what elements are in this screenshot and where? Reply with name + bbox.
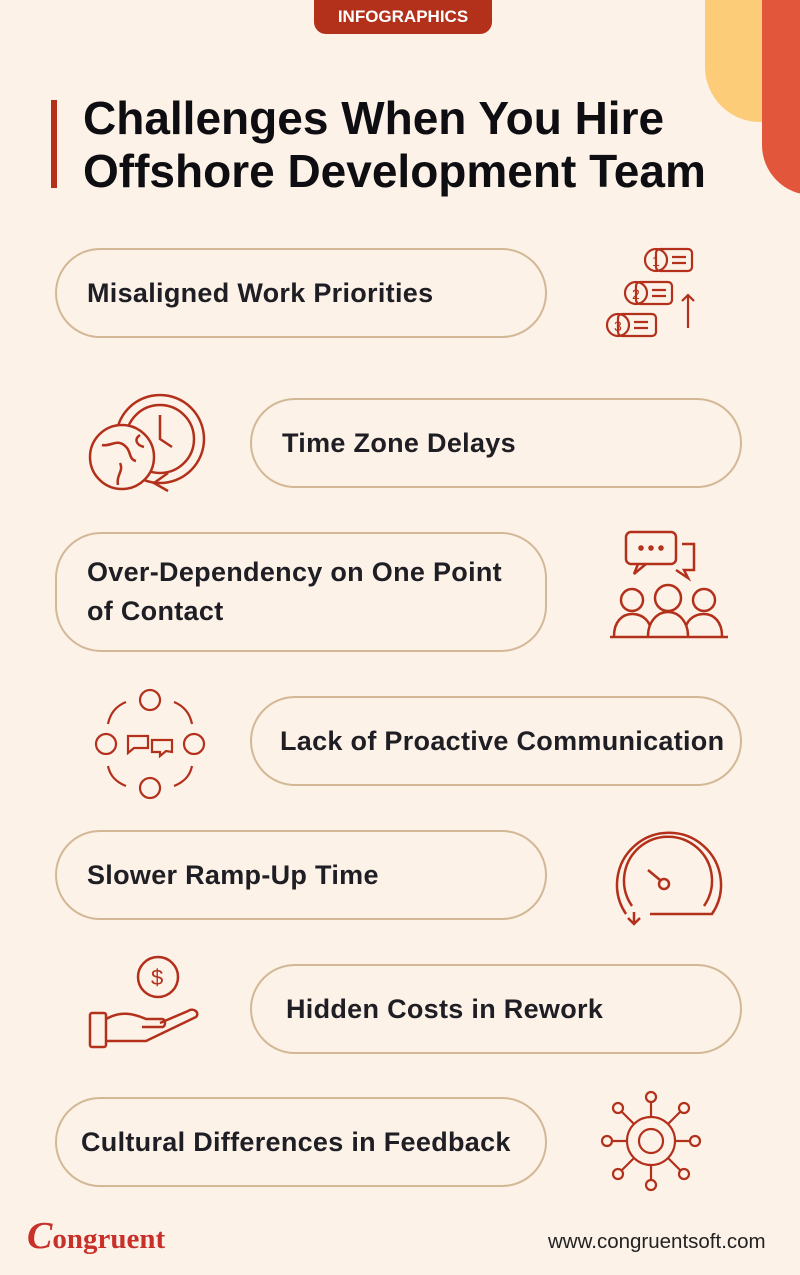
pill 5 xyxy=(55,830,547,920)
pill 3 xyxy=(55,532,547,652)
icon: priorities list: 1 xyxy=(652,253,660,269)
icon: priorities list xyxy=(606,248,695,338)
logo: Congruent xyxy=(27,1215,165,1257)
pill 6 xyxy=(250,964,742,1054)
badge: INFOGRAPHICS xyxy=(338,7,468,26)
title xyxy=(83,92,706,197)
icon: hand with dollar xyxy=(88,956,198,1048)
icon: gear network xyxy=(600,1090,702,1192)
pill 2: Time Zone Delays xyxy=(282,428,516,458)
badge xyxy=(314,0,492,34)
icon: circular communication xyxy=(94,688,206,800)
title: Challenges When You Hire xyxy=(83,92,664,144)
pill 7 xyxy=(55,1097,547,1187)
title accent bar xyxy=(51,100,57,188)
icon: priorities list: 2 xyxy=(632,286,640,302)
pill 1: Misaligned Work Priorities xyxy=(87,278,433,308)
icon: globe clock xyxy=(88,394,206,492)
pill 3: Over-Dependency on One Point xyxy=(87,557,502,587)
icon: priorities list: 3 xyxy=(614,318,622,334)
pill 6: Hidden Costs in Rework xyxy=(286,994,603,1024)
icon: team chat xyxy=(610,530,728,638)
pill 4: Lack of Proactive Communication xyxy=(280,726,724,756)
website: www.congruentsoft.com xyxy=(548,1230,766,1253)
pill 3: of Contact xyxy=(87,596,223,626)
icon: speedometer xyxy=(616,832,722,926)
pill 5: Slower Ramp-Up Time xyxy=(87,860,379,890)
pill 1 xyxy=(55,248,547,338)
title: Offshore Development Team xyxy=(83,145,706,197)
pill 2 xyxy=(250,398,742,488)
icon: hand with dollar: $ xyxy=(151,965,163,990)
decor: yellow shape xyxy=(705,0,800,122)
pill 7: Cultural Differences in Feedback xyxy=(81,1126,511,1156)
pill 4 xyxy=(250,696,742,786)
decor: red shape xyxy=(762,0,800,195)
